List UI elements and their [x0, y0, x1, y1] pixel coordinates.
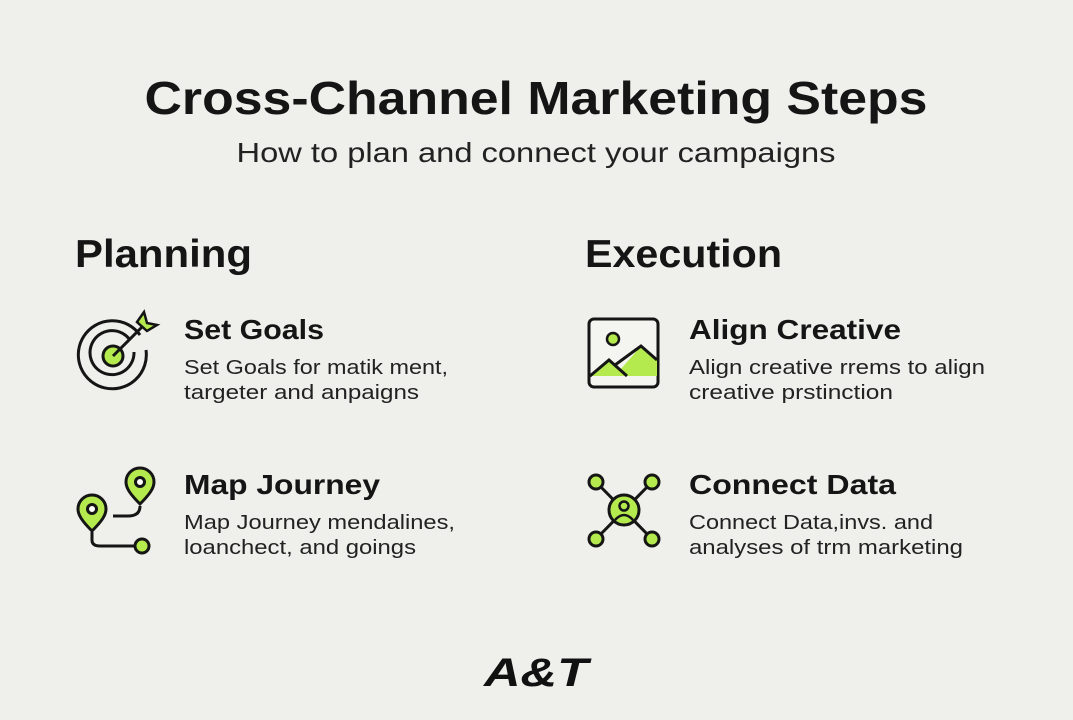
text: Set Goals: Set Goals	[184, 314, 324, 345]
item: Map Journey	[78, 468, 455, 559]
item: Set Goals	[78, 312, 448, 404]
item: Connect Data	[589, 469, 963, 559]
title: Cross-Channel Marketing Steps	[144, 72, 928, 124]
item: Align Creative	[589, 314, 985, 404]
icon: network	[589, 475, 659, 546]
item: Map Journey: loanchect, and goings	[184, 537, 416, 559]
logo: A&T	[483, 651, 592, 695]
text: Map Journey: Map Journey	[184, 469, 380, 500]
item: Set Goals: targeter and anpaigns	[184, 382, 419, 404]
heading: Execution: Execution	[585, 233, 782, 276]
icon: target	[78, 312, 157, 389]
icon: image	[589, 319, 658, 387]
heading: Planning: Planning	[75, 233, 252, 276]
item: Align Creative: Align creative rrems to align	[689, 357, 985, 379]
item: Connect Data: Connect Data,invs. and	[689, 512, 933, 534]
item: Set Goals: Set Goals for matik ment,	[184, 357, 448, 379]
text: Align Creative: Align Creative	[689, 314, 901, 345]
subtitle: How to plan and connect your campaigns	[236, 137, 836, 168]
item: Map Journey: Map Journey mendalines,	[184, 512, 455, 534]
icon: map pins	[78, 468, 154, 553]
item: Connect Data: analyses of trm marketing	[689, 537, 963, 559]
text: Connect Data: Connect Data	[689, 469, 896, 500]
item: Align Creative: creative prstinction	[689, 382, 893, 404]
